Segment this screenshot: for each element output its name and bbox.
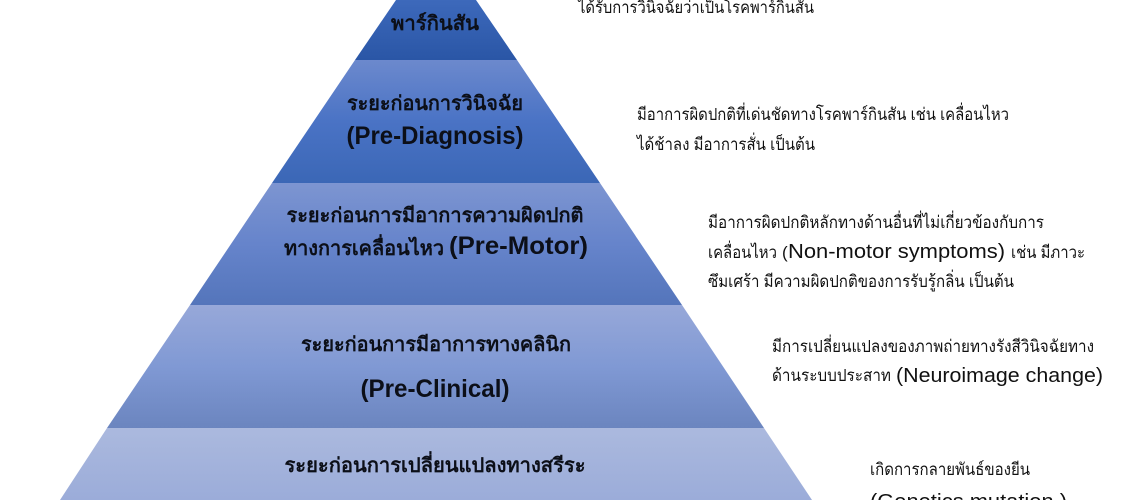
description: pre-motor: ซึมเศร้า มีความผิดปกติของการรับรู้กลิ่น เป็นต้น (708, 269, 1014, 292)
tier: Parkinson's diagnosed: พาร์กินสัน (391, 12, 479, 35)
description: pre-diagnosis (635, 102, 1009, 154)
tier: Pre-Motor: ระยะก่อนการมีอาการความผิดปกติ (286, 204, 584, 227)
description: pre-clinical: มีการเปลี่ยนแปลงของภาพถ่ายทางรังสีวินิจฉัยทาง (772, 334, 1094, 356)
description: pre-clinical: ด้านระบบประสาท (772, 366, 891, 385)
description: genetics (870, 460, 1067, 500)
tier: physiological change: ระยะก่อนการเปลี่ยนแปลงทางสรีระ (284, 450, 586, 477)
description: genetics: เกิดการกลายพันธ์ของยีน (870, 460, 1030, 479)
tier: Pre-Clinical (107, 305, 764, 428)
description: pre-clinical: (Neuroimage change) (896, 365, 1103, 387)
tier: Pre-Clinical: (Pre-Clinical) (360, 375, 510, 403)
description: pre-motor: เคลื่อนไหว (708, 240, 777, 262)
description: pre-motor: Non-motor symptoms) (788, 241, 1005, 263)
description: pre-motor: มีอาการผิดปกติหลักทางด้านอื่นที่ไม่เกี่ยวข้องกับการ (708, 210, 1044, 232)
tier: Pre-Clinical: ระยะก่อนการมีอาการทางคลินิก (301, 333, 571, 356)
description: pre-clinical (772, 334, 1103, 387)
description: pre-motor (708, 210, 1085, 292)
tier: Pre-Motor: (Pre-Motor) (449, 232, 588, 260)
tier: Parkinson's diagnosed (355, 0, 517, 60)
description: pre-motor: เช่น มีภาวะ (1011, 243, 1085, 262)
tier: Pre-Diagnosis: ระยะก่อนการวินิจฉัย (347, 93, 523, 115)
description: pre-diagnosis: มีอาการผิดปกติที่เด่นชัดทางโรคพาร์กินสัน เช่น เคลื่อนไหว (637, 102, 1009, 124)
tier: Pre-Diagnosis: (Pre-Diagnosis) (346, 122, 524, 150)
tier: Pre-Diagnosis (272, 60, 600, 183)
tier: physiological change (60, 428, 812, 500)
description: pre-motor: ( (782, 243, 788, 262)
tier: Pre-Motor: ทางการเคลื่อนไหว (284, 233, 444, 260)
description: pre-diagnosis: ได้ช้าลง มีอาการสั่น เป็นต้น (635, 132, 815, 154)
tier: Pre-Motor (190, 183, 682, 305)
